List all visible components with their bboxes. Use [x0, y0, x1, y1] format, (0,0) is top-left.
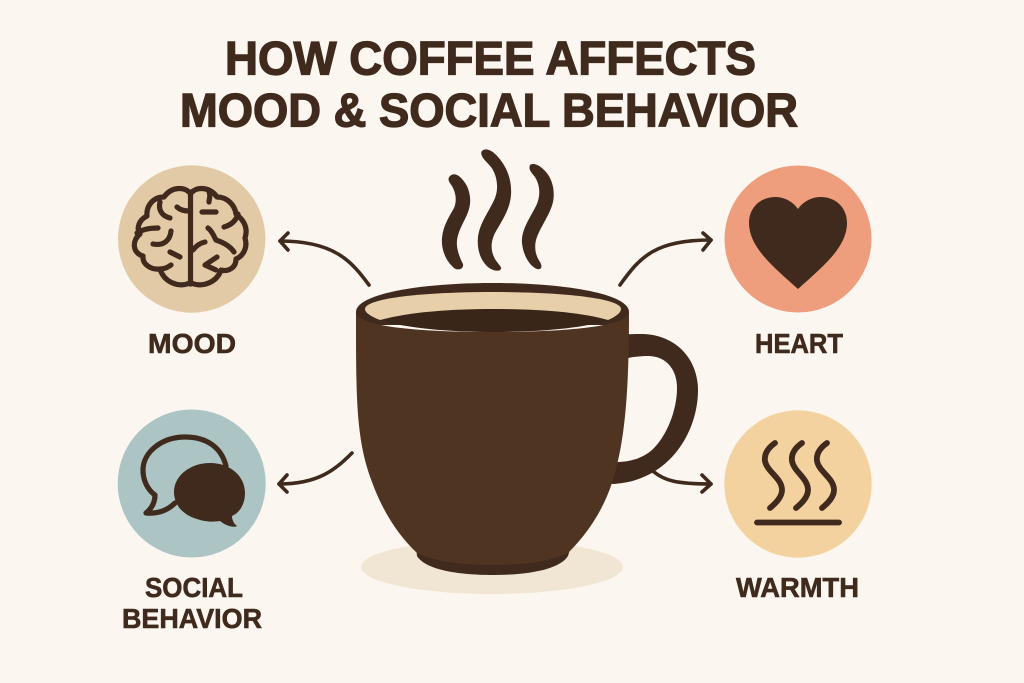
mug body — [356, 312, 629, 565]
warmth label: WARMTH — [736, 572, 859, 603]
arrow: cup to mood — [280, 233, 369, 285]
heart circle — [724, 166, 872, 312]
panel: social behavior — [118, 410, 266, 634]
coffee surface — [380, 309, 608, 332]
social behavior label — [122, 572, 262, 634]
title: MOOD & SOCIAL BEHAVIOR — [180, 84, 798, 136]
saucer shadow — [361, 540, 623, 594]
heart label: HEART — [755, 328, 843, 359]
icon: heat waves — [757, 443, 839, 522]
mood label: MOOD — [148, 328, 236, 359]
outline bubble — [143, 437, 226, 513]
warmth circle — [724, 410, 872, 558]
title: HOW COFFEE AFFECTS — [225, 32, 756, 84]
panel: heart — [724, 166, 872, 359]
panel: mood — [118, 165, 265, 359]
arrow: cup to heart — [620, 233, 711, 285]
icon: steam above cup — [442, 149, 554, 271]
arrow: cup to social behavior — [279, 453, 352, 492]
icon: brain — [134, 188, 246, 285]
title — [180, 32, 798, 136]
coffee mug — [356, 283, 698, 575]
filled bubble — [174, 463, 245, 527]
social behavior label: SOCIAL — [145, 572, 243, 603]
icon: speech bubbles — [143, 437, 245, 527]
social circle — [118, 410, 266, 558]
mood circle — [118, 165, 265, 313]
mug handle — [605, 334, 698, 484]
social behavior label: BEHAVIOR — [122, 603, 262, 634]
icon: heart — [749, 197, 847, 289]
mug foot — [416, 546, 571, 575]
panel: warmth — [724, 410, 872, 603]
inner mug wall — [365, 292, 621, 320]
arrow: cup to warmth — [654, 472, 711, 492]
mug rim — [356, 283, 629, 325]
